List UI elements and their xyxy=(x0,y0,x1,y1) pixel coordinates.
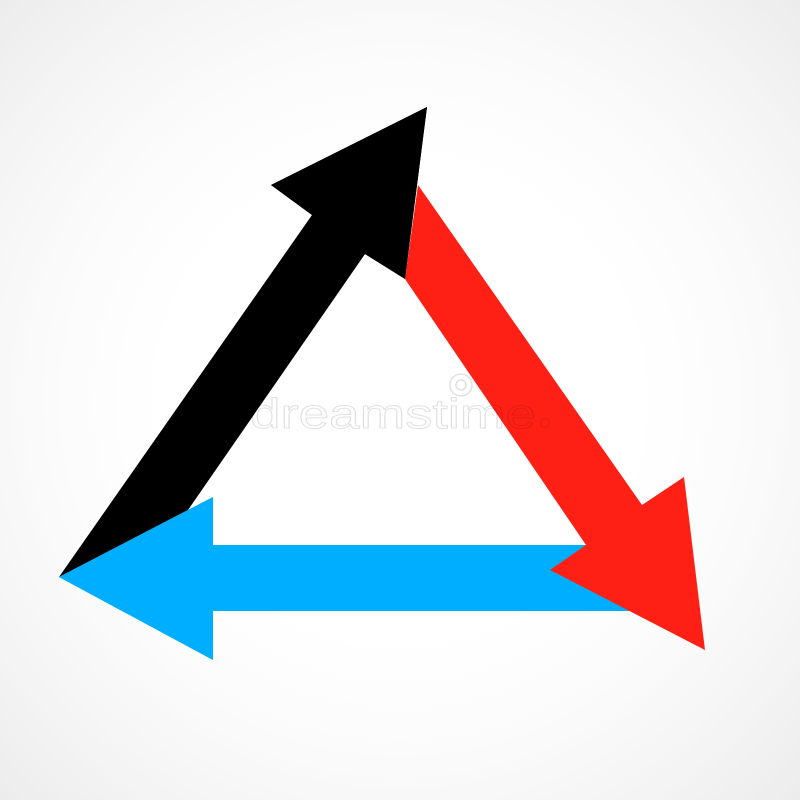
watermark logo xyxy=(450,374,472,396)
arrow: red pointing down-right xyxy=(405,185,705,650)
arrow: black pointing up-right xyxy=(59,107,427,577)
watermark registered mark xyxy=(540,418,550,428)
watermark xyxy=(250,374,550,437)
arrow: blue pointing left xyxy=(59,497,640,660)
watermark wordmark: dreamstime xyxy=(250,390,536,437)
arrow: black head overlap xyxy=(271,107,427,279)
arrow: blue head overlap xyxy=(59,497,213,660)
